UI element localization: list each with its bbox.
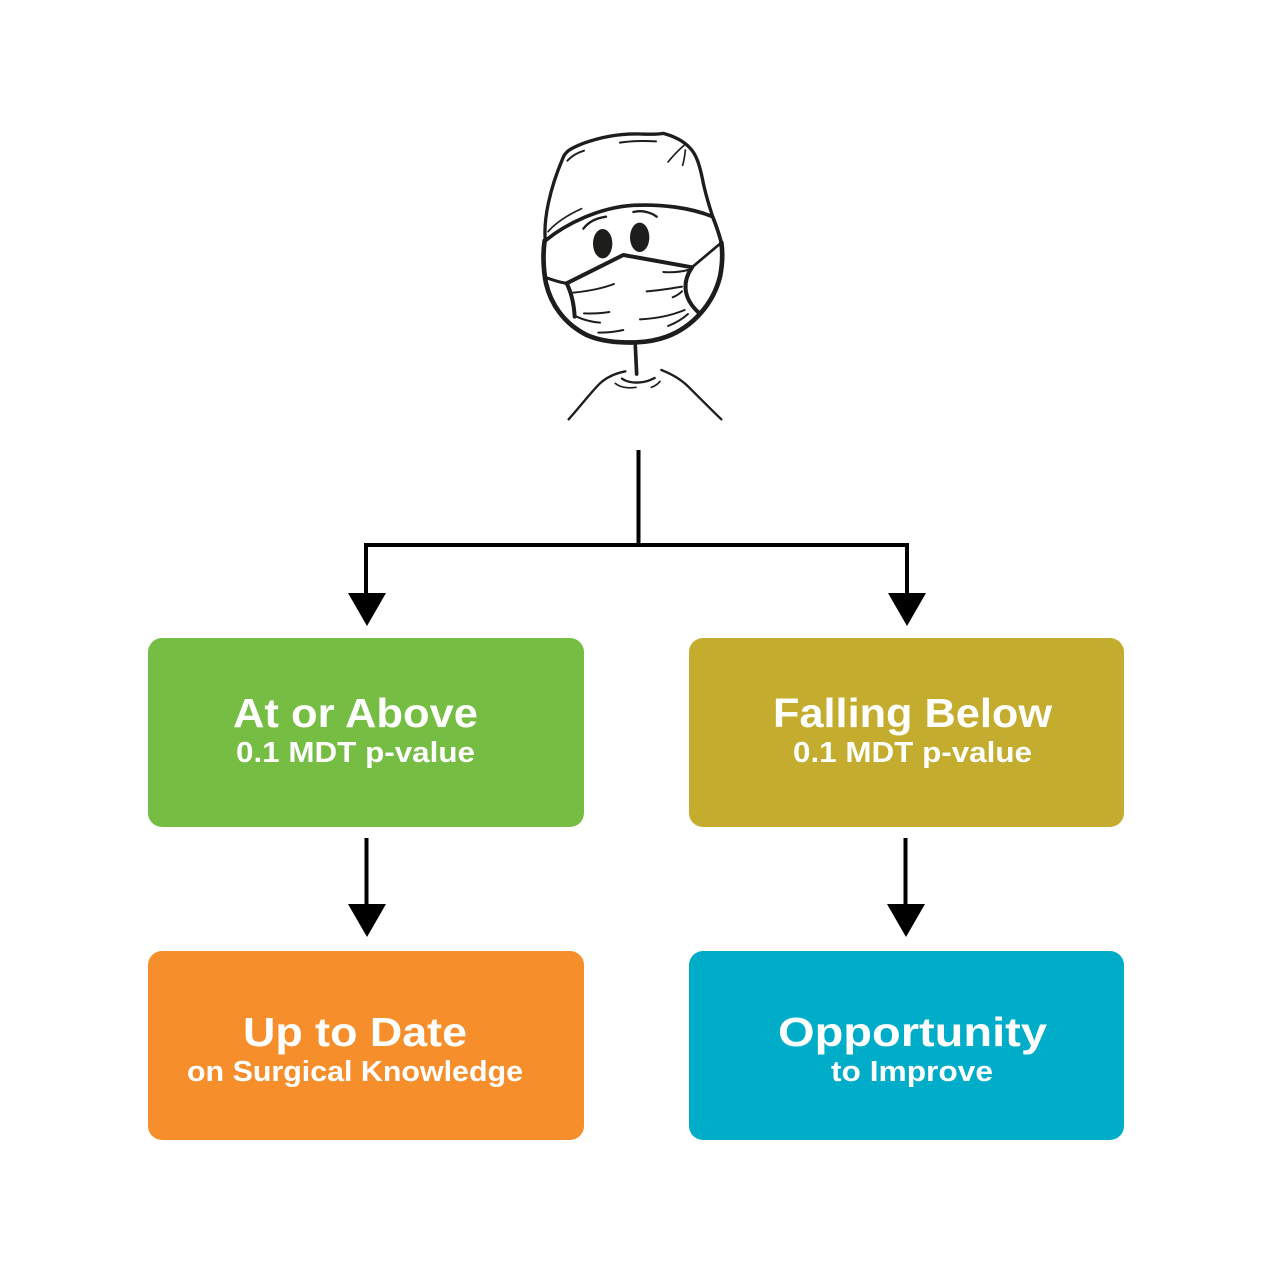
surgical mask (547, 243, 721, 333)
heading: Up to Date (243, 1009, 467, 1055)
neck (635, 346, 637, 374)
arrow: to Opportunity (887, 838, 925, 937)
face outline (544, 241, 722, 343)
surgical cap (545, 133, 721, 243)
subheading: on Surgical Knowledge (187, 1056, 523, 1088)
eyes (593, 223, 649, 258)
shoulders and collar (569, 370, 721, 419)
heading: At or Above (233, 690, 478, 736)
subheading: to Improve (831, 1056, 993, 1088)
panel: Up to Date (148, 951, 584, 1140)
icon: surgeon wearing cap and mask (544, 133, 722, 419)
heading: Falling Below (773, 690, 1052, 736)
arrow: to Falling Below (888, 593, 926, 626)
subheading: 0.1 MDT p-value (236, 737, 475, 769)
heading: Opportunity (778, 1009, 1047, 1055)
subheading: 0.1 MDT p-value (793, 737, 1032, 769)
panel: Falling Below (689, 638, 1124, 827)
arrow: to At or Above (348, 593, 386, 626)
connector: branching lines from surgeon (366, 450, 907, 596)
panel: Opportunity (689, 951, 1124, 1140)
arrow: to Up to Date (348, 838, 386, 937)
panel: At or Above (148, 638, 584, 827)
eyebrows (583, 211, 657, 229)
